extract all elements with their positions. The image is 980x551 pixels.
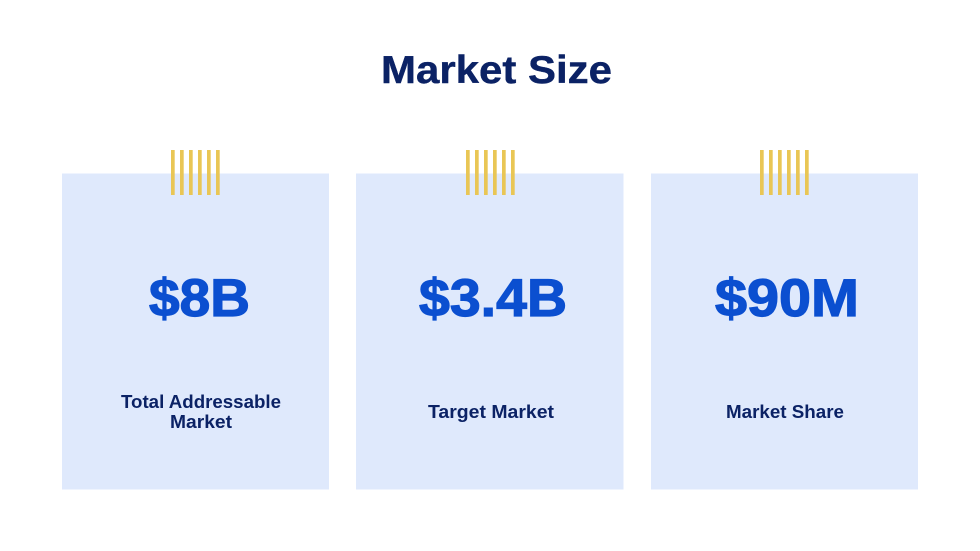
title: Market Size xyxy=(381,49,612,92)
icon: tape stripes xyxy=(466,150,515,195)
icon: tape stripes xyxy=(760,150,809,195)
card background xyxy=(62,174,329,490)
label: total addressable market: Market xyxy=(170,412,232,432)
value: $8B: $8B xyxy=(149,269,250,328)
card background xyxy=(651,174,918,490)
icon: tape stripes xyxy=(171,150,220,195)
panel: market share xyxy=(651,150,918,490)
label: market share: Market Share xyxy=(726,402,844,422)
card background xyxy=(356,174,624,490)
value: $3.4B: $3.4B xyxy=(419,269,567,328)
label: total addressable market: Total Addressable xyxy=(121,392,281,412)
panel: total addressable market xyxy=(62,150,329,490)
label: target market: Target Market xyxy=(428,402,554,422)
value: $90M: $90M xyxy=(715,269,859,328)
label: total addressable market xyxy=(121,392,281,432)
panel: target market xyxy=(356,150,624,490)
